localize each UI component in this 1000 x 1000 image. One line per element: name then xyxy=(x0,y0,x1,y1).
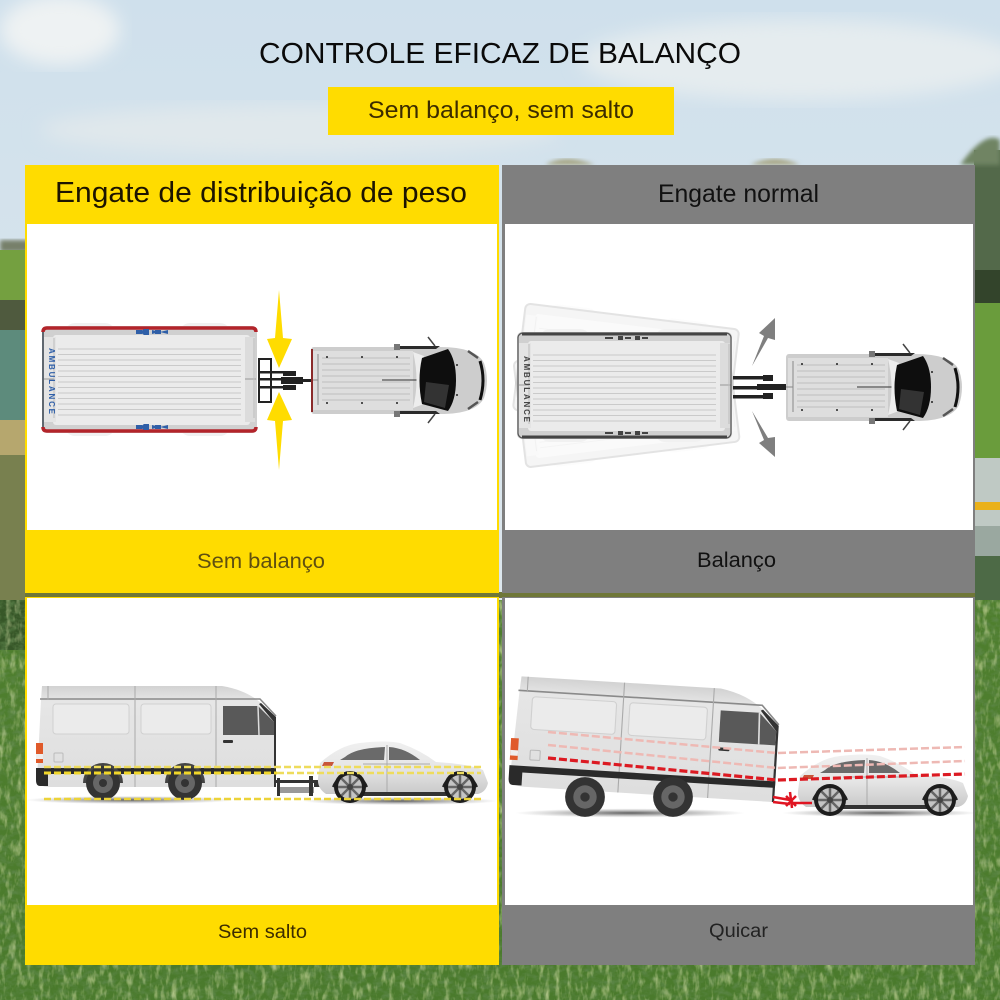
trailer seen from above: AMBULANCE xyxy=(522,356,531,423)
tilted trailer side view xyxy=(508,676,781,817)
car side view xyxy=(798,754,968,816)
panel: normal hitch, top view xyxy=(502,165,975,593)
yellow level dashed lines xyxy=(44,767,481,799)
caption: no bounce: Sem salto xyxy=(218,922,307,943)
caption: bounce: Quicar xyxy=(709,921,769,942)
hitch xyxy=(258,358,313,403)
trailer seen from above xyxy=(517,329,732,442)
heading: normal hitch: Engate normal xyxy=(658,180,819,208)
tow vehicle seen from above xyxy=(786,344,962,430)
title: CONTROLE EFICAZ DE BALANÇO xyxy=(259,38,741,70)
icon: yellow arrow down xyxy=(267,290,292,368)
red dashed lines xyxy=(548,732,965,780)
icon: gray arrow up xyxy=(752,318,775,366)
subtitle badge: Sem balanço, sem salto xyxy=(368,97,634,124)
tow vehicle seen from above xyxy=(311,337,487,423)
icon: yellow arrow up xyxy=(267,392,292,470)
trailer seen from above xyxy=(42,323,257,436)
red broken hitch xyxy=(773,792,812,808)
panel: weight distribution hitch, side view xyxy=(25,597,499,965)
icon: gray arrow down xyxy=(752,411,775,457)
panel: weight distribution hitch, top view xyxy=(25,165,499,593)
ghost trailer swung down xyxy=(513,332,740,471)
heading: weight distribution hitch: Engate de distribuição de peso xyxy=(55,177,467,209)
hitch side view xyxy=(275,776,326,796)
car side view xyxy=(318,742,488,803)
ground shadows xyxy=(515,808,978,818)
hitch xyxy=(733,375,787,399)
trailer side view xyxy=(36,686,276,800)
ghost trailer swung up xyxy=(512,300,740,439)
subtitle badge xyxy=(328,87,674,135)
caption: sway: Balanço xyxy=(697,549,776,572)
ground shadows xyxy=(25,796,498,805)
panel: normal hitch, side view xyxy=(502,597,978,965)
caption: no sway: Sem balanço xyxy=(197,550,325,573)
trailer seen from above: AMBULANCE xyxy=(47,348,56,415)
